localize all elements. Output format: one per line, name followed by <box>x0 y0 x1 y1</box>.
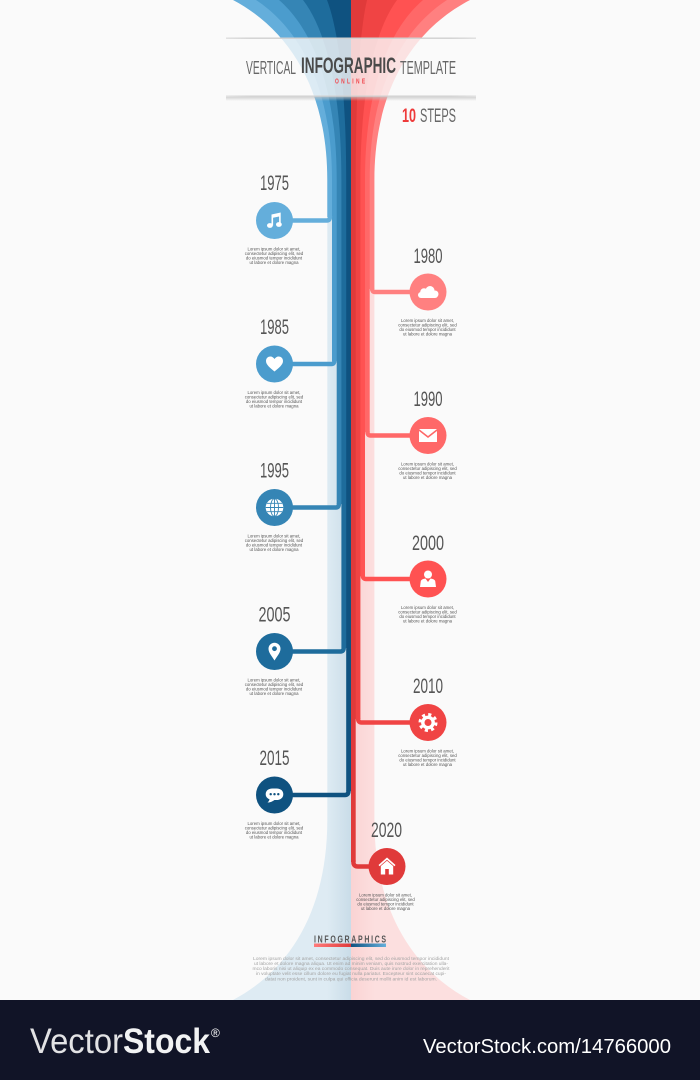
steps count: 10 <box>402 106 416 127</box>
step 1985: Lorem ipsum dolor sit amet, <box>247 390 301 395</box>
red stream bands <box>351 0 470 862</box>
step 2015: do eiusmod tempor incididunt <box>246 830 303 835</box>
step 1980: consectetur adipiscing elit, sed <box>398 322 457 328</box>
step 2010 <box>358 675 457 767</box>
logo: VectorStock <box>30 1022 220 1061</box>
step 2020: consectetur adipiscing elit, sed <box>356 897 415 902</box>
step 1980: do eiusmod tempor incididunt <box>399 327 456 332</box>
step 1980: 1980 <box>414 245 442 268</box>
step 1980 <box>372 245 457 336</box>
step 2000: consectetur adipiscing elit, sed <box>398 610 457 614</box>
step 1990: Lorem ipsum dolor sit amet, <box>401 462 454 466</box>
step 2020: 2020 <box>371 819 402 842</box>
step 1975: ut labore et dolore magna <box>250 260 299 265</box>
step 1985: ut labore et dolore magna <box>250 404 299 408</box>
title: TEMPLATE <box>400 58 456 78</box>
step 1975: do eiusmod tempor incididunt <box>246 256 303 260</box>
step 1995: consectetur adipiscing elit, sed <box>245 538 304 543</box>
step 2015: ut labore et dolore magna <box>250 834 299 840</box>
step 2010: ut labore et dolore magna <box>403 762 453 767</box>
step 2005: Lorem ipsum dolor sit amet, <box>247 678 301 682</box>
step 2015 <box>245 747 349 840</box>
step 1975: consectetur adipiscing elit, sed <box>245 251 304 256</box>
step 2005: do eiusmod tempor incididunt <box>246 686 303 692</box>
step 2010: do eiusmod tempor incididunt <box>399 758 456 762</box>
step 2005: consectetur adipiscing elit, sed <box>245 682 304 687</box>
step 1995: ut labore et dolore magna <box>250 547 299 552</box>
icon: house <box>378 858 396 874</box>
step 1985: 1985 <box>260 316 289 339</box>
steps count <box>402 106 456 127</box>
step 2000: Lorem ipsum dolor sit amet, <box>401 605 454 610</box>
step 1975: 1975 <box>260 172 289 195</box>
step 2015: consectetur adipiscing elit, sed <box>245 826 304 830</box>
image id: VectorStock.com/14766000 <box>423 1036 671 1058</box>
step 2015: Lorem ipsum dolor sit amet, <box>247 821 301 826</box>
step 1980: Lorem ipsum dolor sit amet, <box>401 318 454 323</box>
footer heading: infographics: INFOGRAPHICS <box>314 933 386 945</box>
footer paragraph: datat non proident, sunt in culpa qui officia deserunt mollit anim id est laborum. <box>265 976 437 982</box>
logo: VectorStock: Stock <box>123 1022 210 1061</box>
step 2000: 2000 <box>412 532 444 555</box>
step 2010: 2010 <box>413 675 443 698</box>
step 1990: consectetur adipiscing elit, sed <box>398 466 457 471</box>
step 2000 <box>363 532 457 624</box>
subtitle: online: ONLINE <box>335 79 365 86</box>
icon: person <box>420 570 436 587</box>
step 1975 <box>245 172 330 265</box>
step 1995: do eiusmod tempor incididunt <box>246 542 303 548</box>
title: VERTICAL <box>246 58 296 78</box>
step 1990: 1990 <box>414 388 442 411</box>
step 1995 <box>245 460 339 552</box>
step 1990: do eiusmod tempor incididunt <box>399 470 456 476</box>
footer paragraph: Lorem ipsum dolor sit amet, consectetur adipiscing elit, sed do eiusmod tempor incididunt <box>253 956 450 961</box>
pale stream background <box>233 160 470 1000</box>
footer paragraph: mco laboris nisi ut aliquip ex ea commodo consequat. Duis aute irure dolor in reprehenderit <box>252 966 450 971</box>
icon: cloud <box>418 286 438 298</box>
blue stream bands <box>233 0 351 791</box>
step 2020: ut labore et dolore magna <box>361 906 411 911</box>
logo: VectorStock: ® <box>211 1026 220 1040</box>
step 1985 <box>245 316 334 408</box>
step 2020: do eiusmod tempor incididunt <box>357 902 414 906</box>
icon: music note <box>267 212 282 228</box>
step 2020: Lorem ipsum dolor sit amet, <box>359 892 412 898</box>
step 1990: ut labore et dolore magna <box>403 475 453 480</box>
step 1995: Lorem ipsum dolor sit amet, <box>247 534 301 538</box>
icon: heart <box>266 356 283 372</box>
step 2000: ut labore et dolore magna <box>403 618 453 624</box>
header band <box>226 38 476 101</box>
footer paragraph: ut labore et dolore magna aliqua. Ut enim ad minim veniam, quis nostrud exercitation ulla- <box>254 961 448 966</box>
footer paragraph: in voluptate velit esse cillum dolore eu fugiat nulla pariatur. Excepteur sint occaecat cupi- <box>256 971 446 976</box>
step 2020 <box>353 819 415 911</box>
step 2015: 2015 <box>260 747 290 770</box>
step 1985: do eiusmod tempor incididunt <box>246 399 303 404</box>
step 2005: 2005 <box>258 604 290 626</box>
icon: envelope <box>419 429 437 442</box>
step 2000: do eiusmod tempor incididunt <box>399 614 456 619</box>
step 1990 <box>367 388 457 480</box>
steps count: STEPS <box>420 106 456 127</box>
title: INFOGRAPHIC <box>301 53 396 78</box>
step 1985: consectetur adipiscing elit, sed <box>245 394 304 400</box>
icon: gear <box>420 714 436 730</box>
icon: globe <box>266 499 283 516</box>
step 1995: 1995 <box>260 460 289 482</box>
step 1975: Lorem ipsum dolor sit amet, <box>247 246 301 252</box>
footer paragraph <box>252 956 450 982</box>
step 2010: Lorem ipsum dolor sit amet, <box>401 748 454 754</box>
watermark footer bar <box>0 1000 700 1080</box>
icon: map pin <box>268 643 280 660</box>
icon: speech bubble <box>266 788 283 802</box>
logo: VectorStock: Vector <box>30 1022 123 1061</box>
step 2005 <box>245 604 344 696</box>
step 1980: ut labore et dolore magna <box>403 332 453 336</box>
step 2010: consectetur adipiscing elit, sed <box>398 753 457 758</box>
step 2005: ut labore et dolore magna <box>250 691 299 696</box>
